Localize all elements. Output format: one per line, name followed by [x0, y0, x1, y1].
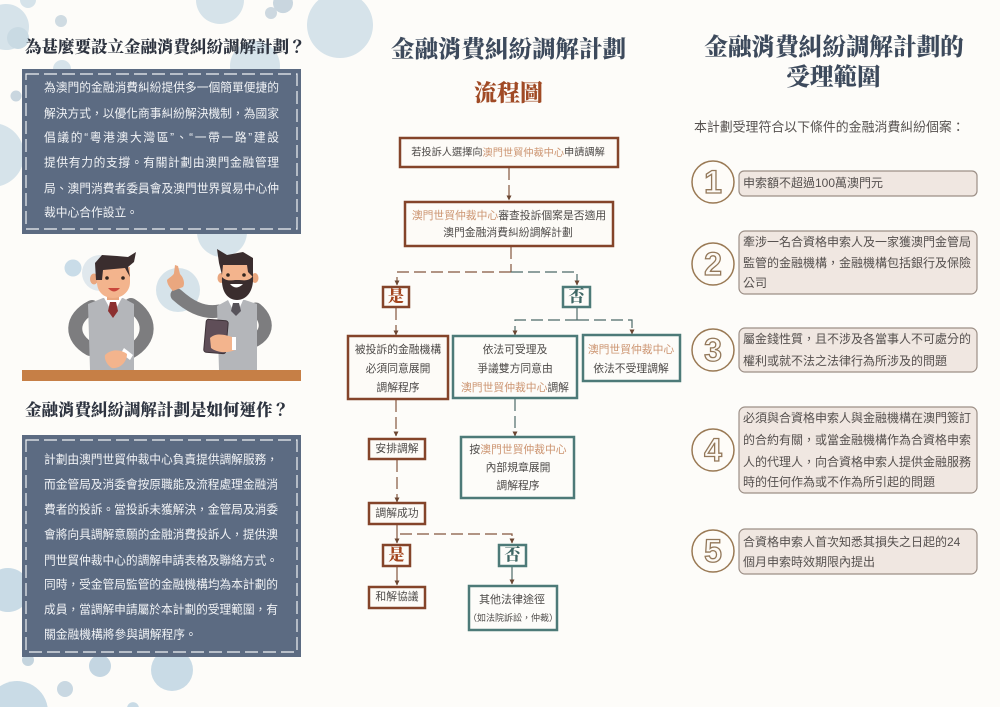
condition 2: 2: [704, 246, 722, 282]
step: centre reviews: [405, 202, 613, 246]
step: settlement: [369, 587, 425, 608]
panel: why text: 解決方式，以優化商事糾紛解決機制，為國家: [44, 106, 279, 120]
step: parties agree: 依法可受理及: [483, 342, 548, 356]
decision: yes second: [383, 545, 410, 566]
panel: how it works text: 而金管局及消委會按原職能及流程處理金融消: [44, 478, 278, 492]
condition 2: 公司: [743, 276, 767, 290]
arrows: [396, 168, 632, 585]
panel: how it works text: [22, 435, 301, 657]
step: centre internal rules: [461, 437, 574, 498]
decision: yes second: 是: [388, 545, 405, 564]
step: institution agrees: 調解程序: [376, 380, 420, 394]
condition 5: [692, 529, 977, 574]
condition 5: 5: [704, 533, 722, 569]
condition 1: 1: [704, 164, 722, 200]
step: mediation success: 調解成功: [375, 506, 419, 520]
panel: how it works text: 計劃由澳門世貿仲裁中心負責提供調解服務，: [44, 452, 278, 466]
decision: no: 否: [568, 286, 585, 306]
panel: how it works text: 同時，受金管局監管的金融機構均為本計劃的: [44, 578, 278, 592]
step: parties agree: [453, 336, 577, 398]
condition 3: 屬金錢性質，且不涉及各當事人不可處分的: [743, 331, 971, 346]
condition 4: 的合約有關，或當金融機構作為合資格申索: [743, 432, 971, 447]
decision: yes: [383, 286, 409, 307]
condition 4: [692, 407, 977, 493]
panel: how it works text: 成員，當調解申請屬於本計劃的受理範圍，有: [44, 602, 278, 616]
panel: why text: 倡議的“粵港澳大灣區”、“一帶一路”建設: [44, 130, 279, 144]
step: applicant applies: 若投訴人選擇向澳門世貿仲裁中心申請調解: [411, 146, 605, 158]
condition 5: 個月申索時效期限內提出: [743, 554, 875, 569]
man on the left: [75, 252, 147, 370]
title: scheme name: 金融消費糾紛調解計劃: [391, 36, 626, 63]
title: scope of the scheme: 金融消費糾紛調解計劃的: [704, 34, 964, 61]
step: other legal routes: 其他法律途徑: [479, 592, 545, 606]
title: scope of the scheme: 受理範圍: [786, 63, 881, 91]
step: arrange mediation: 安排調解: [375, 441, 419, 455]
condition 2: 監管的金融機構，金融機構包括銀行及保險: [743, 255, 971, 270]
step: mediation success: [369, 503, 425, 524]
step: not accepted: 澳門世貿仲裁中心: [588, 342, 674, 356]
step: centre internal rules: 按澳門世貿仲裁中心: [469, 442, 567, 456]
step: institution agrees: 必須同意展開: [366, 361, 430, 375]
step: centre reviews: 澳門金融消費糾紛調解計劃: [443, 225, 573, 239]
illustration: two businessmen at a table: [22, 249, 301, 381]
panel: how it works text: 會將向具調解意願的金融消費投訴人，提供澳: [44, 528, 278, 542]
background bubbles: [0, 0, 373, 707]
panel: why text: 提供有力的支撐。有關計劃由澳門金融管理: [44, 156, 279, 170]
panel: how it works text: 費者的投訴。當投訴未獲解決，金管局及消委: [44, 502, 278, 516]
panel: why text: [22, 69, 301, 234]
panel: how it works text: 門世貿仲裁中心的調解申請表格及聯絡方式。: [44, 554, 278, 568]
heading: how the scheme works: 金融消費糾紛調解計劃是如何運作？: [25, 400, 289, 420]
condition 2: [692, 231, 977, 294]
panel: why text: 裁中心合作設立。: [44, 206, 138, 220]
panel: why text: 為澳門的金融消費糾紛提供多一個簡單便捷的: [44, 80, 279, 94]
condition 3: 權利或就不法之法律行為所涉及的問題: [743, 353, 947, 368]
title: scope of the scheme: [704, 34, 964, 91]
decision: no second: 否: [504, 545, 521, 564]
step: centre internal rules: 調解程序: [496, 478, 540, 492]
step: arrange mediation: [369, 439, 425, 459]
condition 1: [692, 161, 977, 203]
step: applicant applies: [400, 138, 618, 167]
panel: how it works text: 關金融機構將參與調解程序。: [44, 628, 197, 642]
step: other legal routes: （如法院訴訟，仲裁）: [468, 612, 558, 623]
intro text: 本計劃受理符合以下條件的金融消費糾紛個案：: [694, 120, 965, 134]
heading: why set up the scheme: 為甚麼要設立金融消費糾紛調解計劃？: [25, 36, 306, 56]
step: centre internal rules: 內部規章展開: [486, 460, 550, 474]
panel: why text: 局、澳門消費者委員會及澳門世界貿易中心仲: [44, 182, 279, 196]
step: other legal routes: [468, 586, 558, 630]
condition 4: 時的任何作為或不作為所引起的問題: [743, 474, 935, 489]
step: not accepted: 依法不受理調解: [593, 361, 669, 375]
condition 4: 人的代理人，向合資格申索人提供金融服務: [743, 454, 971, 469]
step: institution agrees: 被投訴的金融機構: [355, 342, 441, 356]
decision: no: [563, 286, 590, 307]
step: settlement: 和解協議: [375, 589, 419, 603]
step: parties agree: 爭議雙方同意由: [477, 361, 553, 375]
condition 2: 牽涉一名合資格申索人及一家獲澳門金管局: [743, 234, 971, 249]
condition 5: 合資格申索人首次知悉其損失之日起的24: [743, 534, 961, 549]
step: centre reviews: 澳門世貿仲裁中心審查投訴個案是否適用: [412, 208, 606, 222]
subtitle: flowchart: 流程圖: [474, 80, 543, 106]
decision: no second: [499, 545, 526, 566]
condition 4: 4: [704, 432, 722, 468]
condition 3: 3: [704, 332, 722, 368]
condition 4: 必須與合資格申索人與金融機構在澳門簽訂: [743, 410, 971, 425]
decision: yes: 是: [388, 286, 404, 306]
step: parties agree: 澳門世貿仲裁中心調解: [461, 380, 569, 394]
table edge: [22, 370, 301, 381]
step: institution agrees: [348, 336, 448, 399]
condition 1: 申索額不超過100萬澳門元: [743, 175, 883, 190]
flowchart: [348, 138, 680, 630]
step: not accepted: [583, 335, 680, 381]
man on the right with tablet: [167, 249, 265, 370]
condition 3: [692, 328, 977, 372]
